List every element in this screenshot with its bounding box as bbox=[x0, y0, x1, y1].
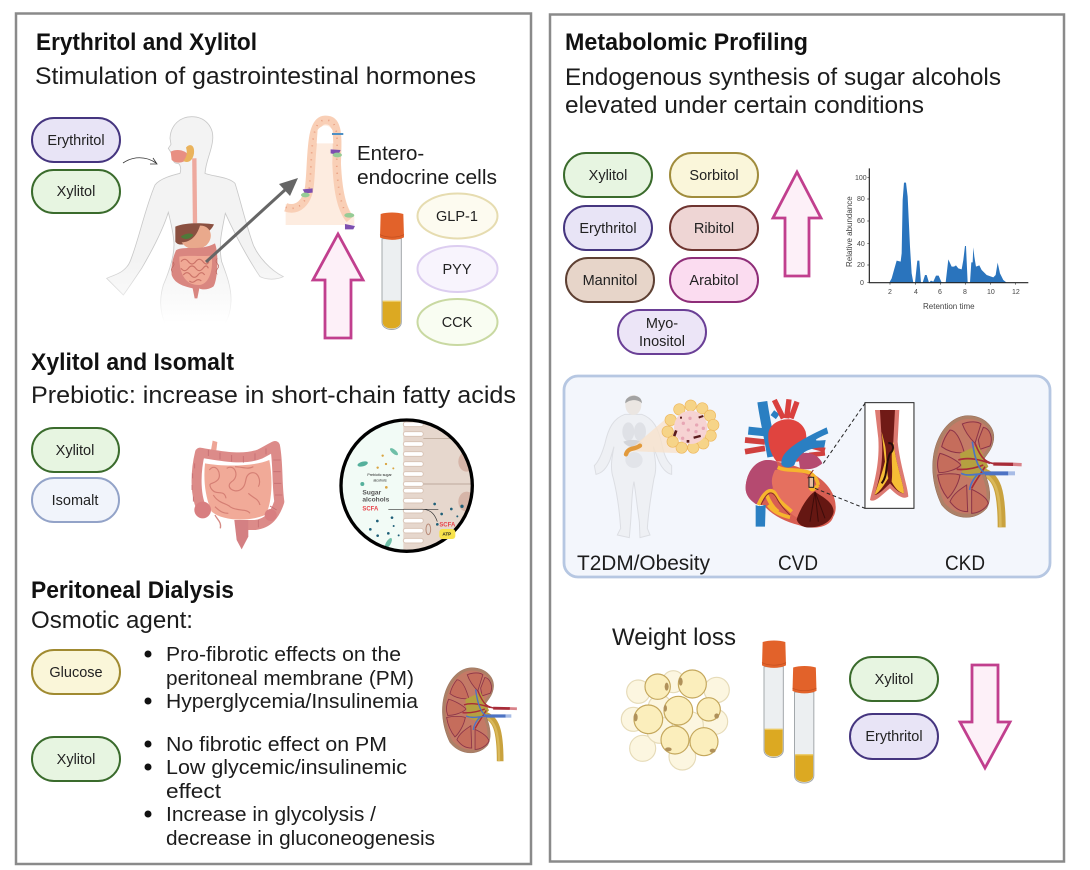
pill: Xylitol bbox=[32, 428, 119, 472]
label: enteroendocrine cells: Entero- bbox=[357, 142, 424, 165]
subheading: endogenous synthesis: elevated under certain conditions bbox=[565, 92, 924, 119]
pill: Xylitol bbox=[850, 657, 938, 701]
heading: Peritoneal Dialysis: Peritoneal Dialysis bbox=[31, 577, 234, 604]
pill: Erythritol bbox=[32, 118, 120, 162]
heading: Xylitol and Isomalt: Xylitol and Isomalt bbox=[31, 349, 234, 376]
oval: GLP-1: GLP-1 bbox=[436, 209, 478, 225]
icon: gut lumen detail circle: Prebiotic sugar bbox=[367, 473, 392, 477]
label: enteroendocrine cells bbox=[357, 142, 497, 189]
chart: chromatogram: 10 bbox=[987, 289, 995, 296]
oval: PYY bbox=[418, 246, 498, 292]
icon: gut lumen detail circle: Sugar bbox=[362, 490, 382, 497]
text block: glucose effects bbox=[144, 643, 419, 713]
pill: Mannitol bbox=[566, 258, 654, 302]
pill: Ribitol bbox=[670, 206, 758, 250]
pill: Glucose: Glucose bbox=[49, 665, 103, 681]
pill: Xylitol bbox=[564, 153, 652, 197]
pill: Glucose bbox=[32, 650, 120, 694]
label: enteroendocrine cells: endocrine cells bbox=[357, 166, 497, 189]
text block: glucose effects: Hyperglycemia/Insulinemia bbox=[166, 690, 419, 713]
chart: chromatogram: 100 bbox=[855, 175, 867, 182]
icon: gut lumen detail circle: ATP bbox=[442, 532, 451, 537]
oval: CCK: CCK bbox=[442, 315, 473, 331]
icon: blood tube one bbox=[762, 640, 786, 757]
label: CVD: CVD bbox=[778, 552, 818, 575]
text block: xylitol effects: No fibrotic effect on PM bbox=[166, 733, 387, 756]
arrow: increase bbox=[773, 172, 821, 276]
pill: Erythritol bbox=[564, 206, 652, 250]
chart: chromatogram: 6 bbox=[938, 289, 942, 296]
chart: chromatogram: Relative abundance bbox=[845, 196, 854, 267]
pill: Ribitol: Ribitol bbox=[694, 221, 734, 237]
chart: chromatogram: Retention time bbox=[923, 302, 975, 311]
chart: chromatogram: 2 bbox=[888, 289, 892, 296]
text block: xylitol effects: Low glycemic/insulinemic bbox=[166, 756, 407, 779]
chart: chromatogram: 0 bbox=[860, 280, 864, 287]
oval: GLP-1 bbox=[418, 194, 498, 238]
pill: Myo-Inositol: Inositol bbox=[639, 334, 685, 350]
heading: Erythritol and Xylitol: Erythritol and Xylitol bbox=[36, 29, 257, 56]
pill: Xylitol: Xylitol bbox=[57, 184, 95, 200]
text block: xylitol effects bbox=[144, 733, 435, 850]
icon: blood tube two bbox=[792, 666, 816, 783]
arrow: gut to villus bbox=[206, 178, 298, 262]
pill: Erythritol: Erythritol bbox=[47, 133, 105, 149]
pill: Xylitol bbox=[32, 737, 120, 781]
heading: Metabolomic Profiling: Metabolomic Profiling bbox=[565, 29, 808, 56]
icon: human body with digestive organs bbox=[107, 117, 283, 323]
chart: chromatogram: 4 bbox=[914, 289, 918, 296]
label: weight loss: Weight loss bbox=[612, 624, 736, 651]
pill: Xylitol bbox=[32, 170, 120, 213]
icon: heart with infarct bbox=[745, 399, 836, 528]
subheading: endogenous synthesis bbox=[565, 64, 1001, 119]
pill: Xylitol: Xylitol bbox=[589, 168, 627, 184]
icon: obese body with adipose cluster bbox=[594, 395, 719, 538]
icon: gut lumen detail circle bbox=[340, 420, 477, 553]
oval: CCK bbox=[418, 299, 498, 345]
icon: blood tube bbox=[380, 212, 404, 329]
chart: chromatogram bbox=[845, 168, 1028, 311]
pill: Myo-Inositol: Myo- bbox=[646, 316, 678, 332]
pill: Erythritol: Erythritol bbox=[865, 729, 923, 745]
pill: Myo-Inositol bbox=[618, 310, 706, 354]
icon: gut lumen detail circle: SCFA bbox=[439, 522, 456, 528]
arrow: decrease bbox=[960, 665, 1010, 768]
text block: glucose effects: Pro-fibrotic effects on the bbox=[166, 643, 401, 666]
label: T2DM/Obesity: T2DM/Obesity bbox=[577, 552, 710, 575]
pill: Erythritol: Erythritol bbox=[579, 221, 637, 237]
subheading: osmotic agent: Osmotic agent: bbox=[31, 607, 193, 634]
text block: xylitol effects: effect bbox=[166, 780, 221, 803]
panel: left column border bbox=[16, 14, 531, 864]
pill: Sorbitol: Sorbitol bbox=[689, 168, 739, 184]
pill: Isomalt bbox=[32, 478, 119, 522]
icon: intestines bbox=[192, 441, 282, 549]
label: CKD: CKD bbox=[945, 552, 985, 575]
text block: xylitol effects: decrease in gluconeogenesis bbox=[166, 827, 435, 850]
icon: gut lumen detail circle: alcohols bbox=[373, 478, 387, 482]
pill: Arabitol bbox=[670, 258, 758, 302]
chart: chromatogram: 80 bbox=[857, 196, 865, 203]
pill: Xylitol: Xylitol bbox=[56, 443, 94, 459]
subheading: endogenous synthesis: Endogenous synthesis of sugar alcohols bbox=[565, 64, 1001, 91]
icon: gut lumen detail circle: SCFA bbox=[362, 507, 379, 513]
chart: chromatogram: 8 bbox=[963, 289, 967, 296]
icon: intestinal villus with enteroendocrine cells bbox=[286, 116, 355, 229]
icon: gut lumen detail circle: alcohols bbox=[362, 496, 390, 503]
subheading: preobiotic: Prebiotic: increase in short-chain fatty acids bbox=[31, 382, 516, 409]
pill: Xylitol: Xylitol bbox=[875, 672, 913, 688]
pill: Sorbitol bbox=[670, 153, 758, 197]
text block: glucose effects: peritoneal membrane (PM) bbox=[166, 667, 414, 690]
chart: chromatogram: 40 bbox=[857, 241, 865, 248]
icon: fat cells bbox=[621, 670, 729, 770]
arrow: ingestion curve bbox=[123, 158, 157, 164]
arrow: increase bbox=[313, 234, 363, 338]
icon: kidney large bbox=[933, 416, 1022, 527]
panel: right column border bbox=[550, 14, 1064, 862]
text block: xylitol effects: Increase in glycolysis / bbox=[166, 803, 376, 826]
pill: Xylitol: Xylitol bbox=[57, 752, 95, 768]
icon: kidney small bbox=[442, 668, 517, 761]
pill: Mannitol: Mannitol bbox=[583, 273, 637, 289]
icon: artery inset bbox=[815, 403, 914, 508]
subheading: gastrointestinal hormones: Stimulation of gastrointestinal hormones bbox=[35, 63, 476, 90]
oval: PYY: PYY bbox=[442, 262, 472, 278]
pill: Arabitol: Arabitol bbox=[689, 273, 739, 289]
chart: chromatogram: 12 bbox=[1012, 289, 1020, 296]
pill: Erythritol bbox=[850, 714, 938, 759]
chart: chromatogram: 60 bbox=[857, 218, 865, 225]
pill: Isomalt: Isomalt bbox=[52, 493, 98, 509]
chart: chromatogram: 20 bbox=[857, 262, 865, 269]
panel: conditions bbox=[564, 376, 1050, 577]
